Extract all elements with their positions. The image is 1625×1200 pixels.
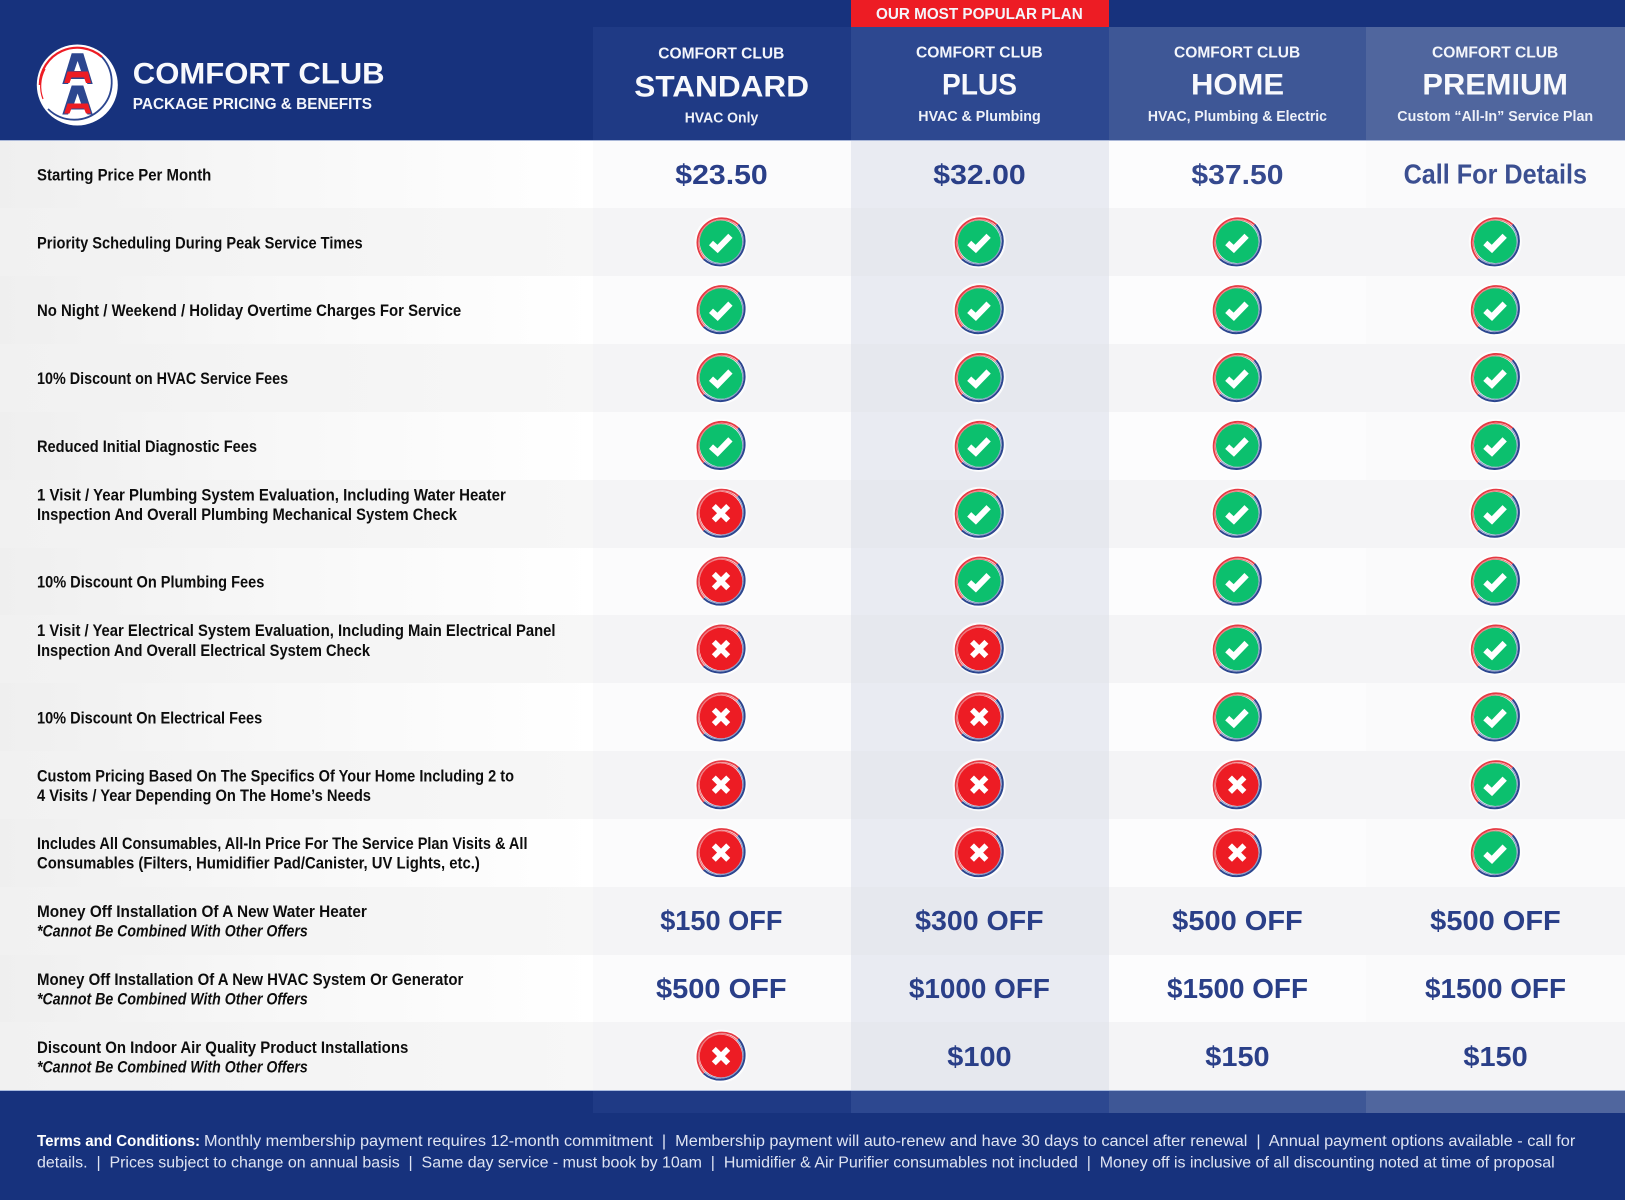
column heading: plus <box>916 44 1043 125</box>
banner: most popular plan <box>851 0 1109 27</box>
subtitle: PACKAGE PRICING & BENEFITS <box>133 96 372 113</box>
row: indoor air quality discount: $150 <box>1463 1041 1528 1072</box>
icon: cross <box>694 487 748 540</box>
icon: check <box>953 215 1006 268</box>
row: electrical discount <box>37 690 1522 743</box>
column heading: premium: PREMIUM <box>1422 69 1568 102</box>
icon: check <box>1469 622 1522 676</box>
row: water heater offer: $150 OFF <box>660 905 782 936</box>
column heading: standard <box>634 46 809 127</box>
icon: cross <box>694 555 748 608</box>
terms and conditions: Monthly membership payment requires 12-month commitment | Membership payment will auto-renew and have 30 days to cancel after renewal | Annual payment options available - call for <box>204 1133 1575 1150</box>
row: starting price: $37.50 <box>1191 159 1284 190</box>
icon: check <box>1469 690 1522 743</box>
icon: check <box>1211 215 1264 268</box>
icon: check <box>1469 758 1522 811</box>
icon: cross <box>953 690 1006 743</box>
icon: check <box>953 283 1006 336</box>
icon: cross <box>953 826 1006 879</box>
icon: check <box>953 487 1006 540</box>
row: water heater offer: $500 OFF <box>1430 905 1561 936</box>
column heading: plus: COMFORT CLUB <box>916 44 1043 62</box>
icon: check <box>1211 351 1264 404</box>
icon: check <box>694 351 748 404</box>
row: all consumables: Consumables (Filters, Humidifier Pad/Canister, UV Lights, etc.) <box>37 854 480 872</box>
icon: check <box>953 555 1006 608</box>
icon: check <box>1469 283 1522 336</box>
terms and conditions <box>37 1133 1575 1172</box>
icon: check <box>1211 690 1264 743</box>
row: hvac service discount: 10% Discount on HVAC Service Fees <box>37 370 288 388</box>
icon: check <box>1211 555 1264 608</box>
icon: cross <box>694 1030 748 1083</box>
row: custom pricing: 4 Visits / Year Depending On The Home’s Needs <box>37 787 371 805</box>
row: water heater offer: *Cannot Be Combined With Other Offers <box>37 923 308 941</box>
row: priority scheduling <box>37 215 1522 268</box>
row: water heater offer <box>37 903 1561 941</box>
icon: check <box>1469 351 1522 404</box>
icon: cross <box>694 758 748 811</box>
row: starting price: Call For Details <box>1404 158 1587 190</box>
icon: check <box>1469 419 1522 472</box>
row: indoor air quality discount: $100 <box>947 1041 1012 1072</box>
column heading: standard: HVAC Only <box>685 110 758 126</box>
terms and conditions: details. | Prices subject to change on annual basis | Same day service - must book by 10am | Humidifier & Air Purifier consumables not included | Money off is inclusive of all discounting noted at time of proposal <box>37 1154 1555 1172</box>
row: hvac system offer: $500 OFF <box>656 973 787 1004</box>
column heading: home <box>1148 44 1327 125</box>
row: indoor air quality discount: $150 <box>1205 1041 1270 1072</box>
row: reduced diagnostic fees: Reduced Initial Diagnostic Fees <box>37 438 257 456</box>
row: custom pricing: Custom Pricing Based On The Specifics Of Your Home Including 2 to <box>37 767 514 785</box>
row: custom pricing <box>37 758 1522 811</box>
icon: cross <box>694 826 748 879</box>
column heading: premium: COMFORT CLUB <box>1432 44 1558 62</box>
row: reduced diagnostic fees <box>37 419 1522 472</box>
row: starting price: Starting Price Per Month <box>37 166 211 184</box>
icon: check <box>1211 283 1264 336</box>
row: water heater offer: $500 OFF <box>1172 905 1303 936</box>
icon: cross <box>1211 758 1264 811</box>
row: hvac system offer: $1500 OFF <box>1425 973 1566 1004</box>
icon: check <box>1469 826 1522 879</box>
icon: check <box>1469 215 1522 268</box>
row: hvac service discount <box>37 351 1522 404</box>
icon: check <box>694 283 748 336</box>
table body background <box>0 140 1625 1091</box>
row: hvac system offer: $1500 OFF <box>1167 973 1308 1004</box>
row: electrical discount: 10% Discount On Electrical Fees <box>37 710 262 728</box>
row: plumbing evaluation: 1 Visit / Year Plumbing System Evaluation, Including Water Heater <box>37 486 506 504</box>
row: priority scheduling: Priority Scheduling During Peak Service Times <box>37 234 363 252</box>
terms and conditions: Terms and Conditions: <box>37 1133 200 1150</box>
row: starting price <box>37 158 1587 190</box>
icon: cross <box>953 758 1006 811</box>
row: plumbing evaluation: Inspection And Overall Plumbing Mechanical System Check <box>37 506 458 524</box>
icon: check <box>1211 419 1264 472</box>
row: starting price: $32.00 <box>933 159 1026 190</box>
row: indoor air quality discount: *Cannot Be Combined With Other Offers <box>37 1058 308 1076</box>
row: no overtime charges <box>37 283 1522 336</box>
row: hvac system offer: $1000 OFF <box>909 973 1050 1004</box>
column heading: premium <box>1397 44 1593 125</box>
icon: check <box>953 351 1006 404</box>
icon: cross <box>694 622 748 676</box>
icon: check <box>1211 487 1264 540</box>
title: COMFORT CLUB <box>133 58 385 90</box>
row: hvac system offer: *Cannot Be Combined With Other Offers <box>37 991 308 1009</box>
column heading: plus: PLUS <box>942 69 1017 102</box>
icon: check <box>1211 622 1264 676</box>
icon: check <box>694 419 748 472</box>
icon: cross <box>1211 826 1264 879</box>
icon: check <box>694 215 748 268</box>
column heading: plus: HVAC & Plumbing <box>918 109 1041 125</box>
icon: check <box>1469 487 1522 540</box>
header column backgrounds <box>593 27 1625 140</box>
column heading: standard: STANDARD <box>634 70 809 103</box>
column heading: home: COMFORT CLUB <box>1174 44 1300 62</box>
footer column color strips <box>593 1091 1625 1113</box>
row: electrical evaluation: 1 Visit / Year Electrical System Evaluation, Including Main Electrical Panel <box>37 622 556 640</box>
column heading: standard: COMFORT CLUB <box>658 46 784 63</box>
row: plumbing evaluation <box>37 486 1522 540</box>
row: starting price: $23.50 <box>675 159 768 190</box>
row: hvac system offer: Money Off Installation Of A New HVAC System Or Generator <box>37 971 464 989</box>
row: plumbing discount <box>37 555 1522 608</box>
row: electrical evaluation <box>37 622 1522 676</box>
banner: most popular plan: OUR MOST POPULAR PLAN <box>876 6 1083 23</box>
icon: check <box>1469 555 1522 608</box>
row: all consumables <box>37 826 1522 879</box>
row: indoor air quality discount <box>37 1030 1528 1083</box>
icon: check <box>953 419 1006 472</box>
icon: cross <box>953 622 1006 676</box>
row: water heater offer: $300 OFF <box>915 905 1044 936</box>
row: hvac system offer <box>37 971 1566 1009</box>
icon: cross <box>694 690 748 743</box>
column heading: premium: Custom “All-In” Service Plan <box>1397 109 1593 125</box>
row: electrical evaluation: Inspection And Overall Electrical System Check <box>37 642 371 660</box>
row: indoor air quality discount: Discount On Indoor Air Quality Product Installations <box>37 1039 408 1057</box>
row: water heater offer: Money Off Installation Of A New Water Heater <box>37 903 367 921</box>
row: all consumables: Includes All Consumables, All-In Price For The Service Plan Visits & All <box>37 835 528 853</box>
column heading: home: HVAC, Plumbing & Electric <box>1148 109 1327 125</box>
row: no overtime charges: No Night / Weekend / Holiday Overtime Charges For Service <box>37 302 461 320</box>
row: plumbing discount: 10% Discount On Plumbing Fees <box>37 574 264 592</box>
column heading: home: HOME <box>1191 69 1284 102</box>
icon: company logo <box>37 44 118 126</box>
